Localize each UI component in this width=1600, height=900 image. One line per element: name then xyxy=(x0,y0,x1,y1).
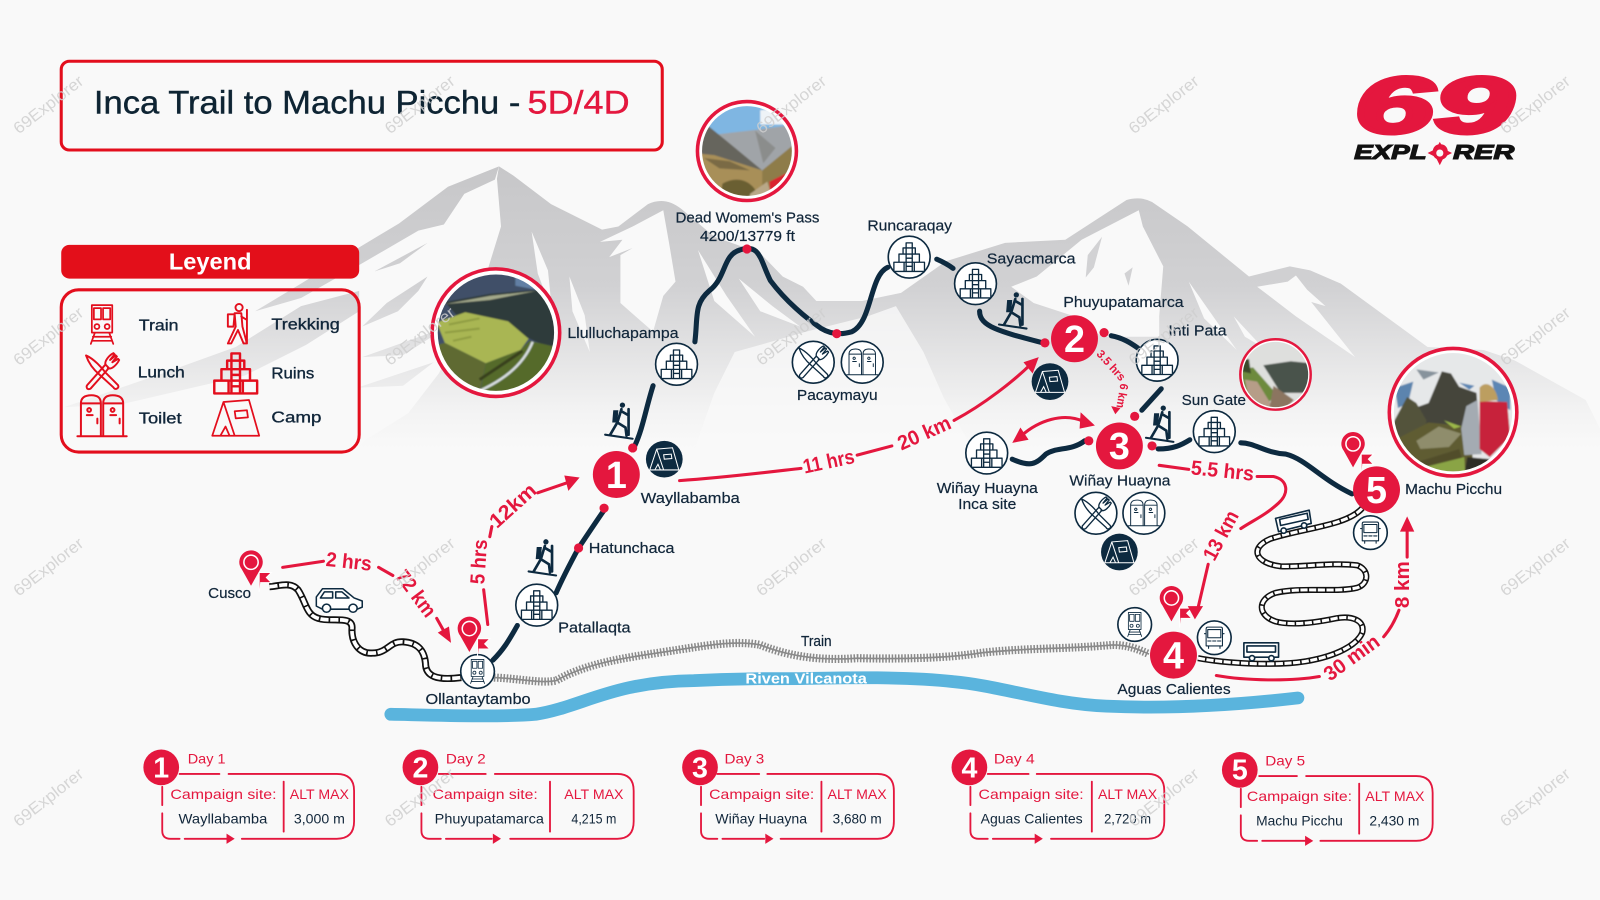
place labels: Cusco xyxy=(208,586,251,602)
watermarks: 69Explorer xyxy=(1497,765,1574,831)
red route: Wayllabamba to Phuyupatamarca xyxy=(680,357,1039,481)
panel: day 2 xyxy=(403,749,634,844)
legend: train xyxy=(91,305,179,344)
watermarks: 69Explorer xyxy=(1497,534,1574,600)
red route: Phuyupatamarca to Wiñay Huayna xyxy=(1094,348,1130,414)
train track xyxy=(494,643,1149,682)
watermarks: 69Explorer xyxy=(1125,765,1203,831)
river: Vilcanota xyxy=(391,672,1298,716)
legend: ruins: Ruins xyxy=(271,366,314,383)
panel: day 3 xyxy=(682,749,894,844)
icon circles: train and bus xyxy=(461,516,1387,688)
panel: day 4: Day 4 xyxy=(994,751,1035,767)
panel: day 3: Day 3 xyxy=(724,751,764,767)
red route: Aguas Calientes to Machu Picchu xyxy=(1216,516,1414,686)
place labels: Aguas Calientes xyxy=(1117,682,1231,698)
panel: day 4: 2,720 m xyxy=(1104,811,1151,826)
step badges on map: 4 xyxy=(1163,634,1184,676)
place labels: Pacaymayu xyxy=(797,388,878,404)
panel: day 4: Aguas Calientes xyxy=(981,811,1083,826)
red route: Cusco to Ollantaytambo: 72 km xyxy=(390,566,440,622)
place labels: Wiñay Huayna xyxy=(1069,474,1171,490)
panel: day 1: Day 1 xyxy=(188,751,226,767)
trail: navy route segments xyxy=(493,248,1352,660)
red route: Aguas Calientes to Machu Picchu: 8 km xyxy=(1392,561,1414,608)
panel: day 5: 2,430 m xyxy=(1369,814,1419,829)
place labels: Inca site xyxy=(958,497,1016,513)
place labels: Sayacmarca xyxy=(987,251,1076,267)
watermarks: 69Explorer xyxy=(1125,303,1203,369)
map pins xyxy=(239,432,1373,658)
step badges on map: 1 xyxy=(606,454,627,496)
legend: toilet xyxy=(77,395,182,436)
red double arrow: Wiñay Huayna site xyxy=(1012,412,1095,443)
title box xyxy=(61,61,662,150)
panel: day 5: Day 5 xyxy=(1265,753,1305,769)
step badges on map: 3 xyxy=(1109,425,1130,467)
place labels: Patallaqta xyxy=(558,621,631,637)
legend heading xyxy=(61,245,359,279)
mountains backdrop xyxy=(64,166,1600,490)
watermarks: 69Explorer xyxy=(753,72,830,138)
red route: Wiñay Huayna to Aguas Calientes: 5.5 hrs xyxy=(1190,457,1255,486)
panel: day 5: 5 xyxy=(1232,755,1248,787)
legend: camp xyxy=(212,400,322,436)
legend: trekking: Trekking xyxy=(271,317,340,334)
red route: Wiñay Huayna to Aguas Calientes: 13 km xyxy=(1199,507,1244,564)
photo: Dead Woman's Pass xyxy=(694,100,801,207)
legend: lunch xyxy=(86,353,185,389)
photo: Sun Gate xyxy=(1240,339,1311,410)
watermarks: 69Explorer xyxy=(10,303,88,369)
panel: day 3: 3,680 m xyxy=(833,811,882,826)
panel: day 1: Wayllabamba xyxy=(179,811,268,826)
step badges on map xyxy=(593,315,1400,679)
panel: day 5: Campaign site: xyxy=(1247,789,1352,805)
panel: day 5: ALT MAX xyxy=(1365,789,1425,805)
icon: hikers xyxy=(529,292,1173,576)
watermarks: 69Explorer xyxy=(10,72,88,138)
watermarks: 69Explorer xyxy=(382,765,459,831)
red route: Phuyupatamarca to Wiñay Huayna: 3.5 hrs xyxy=(1094,348,1128,384)
logo: 69 Explorer: EXPL xyxy=(1354,142,1427,164)
waypoint dots xyxy=(574,244,1157,553)
place labels: Dead Womem's Pass xyxy=(676,210,819,226)
legend: train: Train xyxy=(139,318,179,335)
place labels: Ollantaytambo xyxy=(426,692,531,708)
place labels: Sun Gate xyxy=(1182,393,1246,409)
photo: Machu Picchu xyxy=(1389,348,1517,480)
legend: ruins xyxy=(214,353,314,393)
red route: Ollantaytambo to Wayllabamba xyxy=(467,476,580,624)
watermarks: 69Explorer xyxy=(1497,303,1574,369)
legend: lunch: Lunch xyxy=(138,365,185,382)
watermarks: 69Explorer xyxy=(1125,534,1203,600)
icon circles: camp xyxy=(646,363,1138,570)
panel: day 1: 1 xyxy=(153,753,169,785)
panel: day 4: Campaign site: xyxy=(979,787,1084,803)
road: Aguas Calientes to Machu Picchu xyxy=(1198,508,1366,664)
place labels: Hatunchaca xyxy=(589,541,675,557)
place labels: 4200/13779 ft xyxy=(700,229,795,245)
panel: day 1 xyxy=(143,749,354,844)
river label: Riven Vilcanota xyxy=(745,672,868,688)
road: Cusco to Ollantaytambo xyxy=(269,585,461,679)
logo: 69 Explorer: 69 xyxy=(1354,61,1513,150)
red route: Wayllabamba to Phuyupatamarca: 11 hrs xyxy=(801,446,857,479)
watermarks: 69Explorer xyxy=(753,534,830,600)
red route: Ollantaytambo to Wayllabamba: 5 hrs xyxy=(467,539,492,585)
red route: Cusco to Ollantaytambo xyxy=(283,549,451,643)
watermarks: 69Explorer xyxy=(1497,72,1574,138)
icon: buses on road xyxy=(1244,510,1311,661)
logo: 69 Explorer: O xyxy=(1433,142,1448,164)
panel: day 4: 4 xyxy=(961,753,977,785)
panel: day 1: Campaign site: xyxy=(170,787,277,803)
panel: day 1: ALT MAX xyxy=(290,787,349,803)
place labels: Machu Picchu xyxy=(1405,482,1502,498)
legend heading: Leyend xyxy=(169,248,252,274)
icon circles: lunch and toilet xyxy=(792,341,1165,534)
legend: trekking xyxy=(228,304,340,343)
panel: day 3: ALT MAX xyxy=(828,787,887,803)
red route: Phuyupatamarca to Wiñay Huayna: 6 km xyxy=(1113,383,1130,409)
panel: day 2: 2 xyxy=(412,753,428,785)
red route: Cusco to Ollantaytambo: 2 hrs xyxy=(325,549,373,576)
panel: legend xyxy=(61,290,359,452)
legend: camp: Camp xyxy=(271,409,322,426)
logo: 69 Explorer xyxy=(1354,61,1515,165)
place labels: Runcaraqay xyxy=(867,219,953,235)
photo: Llulluchapampa xyxy=(432,269,561,400)
place labels: Llulluchapampa xyxy=(567,326,679,342)
watermarks: 69Explorer xyxy=(10,765,88,831)
panel: day 2: 4,215 m xyxy=(571,811,616,826)
title: Inca Trail to Machu Picchu - xyxy=(94,83,520,120)
legend: toilet: Toilet xyxy=(139,410,182,427)
panel: day 3: Wiñay Huayna xyxy=(715,811,807,826)
panel: day 2: Campaign site: xyxy=(433,787,538,803)
watermarks: 69Explorer xyxy=(1125,72,1203,138)
panel: day 2: Phuyupatamarca xyxy=(435,811,544,826)
place labels: Inti Pata xyxy=(1168,324,1227,340)
watermarks: 69Explorer xyxy=(382,534,459,600)
watermarks: 69Explorer xyxy=(382,303,459,369)
place labels xyxy=(208,210,1502,708)
panel: day 5: Machu Picchu xyxy=(1256,814,1343,829)
panel: day 1: 3,000 m xyxy=(294,811,345,826)
watermarks: 69Explorer xyxy=(753,303,830,369)
panel: day 5 xyxy=(1222,752,1433,846)
red route: Wiñay Huayna to Aguas Calientes xyxy=(1159,457,1286,619)
red route: Wayllabamba to Phuyupatamarca: 20 km xyxy=(894,412,955,455)
panel: day 3: Campaign site: xyxy=(709,787,814,803)
red route: Aguas Calientes to Machu Picchu: 30 min xyxy=(1320,631,1384,686)
place labels: Wiñay Huayna xyxy=(937,481,1039,497)
icon circles: ruins xyxy=(516,236,1235,626)
red route: Ollantaytambo to Wayllabamba: 12km xyxy=(486,480,541,533)
icon: car xyxy=(316,589,362,612)
train label: Train xyxy=(801,634,832,650)
place labels: Wayllabamba xyxy=(641,491,741,507)
step badges on map: 2 xyxy=(1064,318,1085,360)
title accent: 5D/4D: 5D/4D xyxy=(528,83,630,120)
panel: day 4: ALT MAX xyxy=(1098,787,1158,803)
watermarks: 69Explorer xyxy=(10,534,88,600)
step badges on map: 5 xyxy=(1366,469,1387,511)
panel: day 3: 3 xyxy=(692,753,708,785)
logo: 69 Explorer: RER xyxy=(1453,142,1515,164)
panel: day 2: Day 2 xyxy=(446,751,486,767)
panel: day 2: ALT MAX xyxy=(564,787,624,803)
panel: day 4 xyxy=(952,749,1164,844)
place labels: Phuyupatamarca xyxy=(1063,295,1185,311)
watermarks: 69Explorer xyxy=(382,72,459,138)
